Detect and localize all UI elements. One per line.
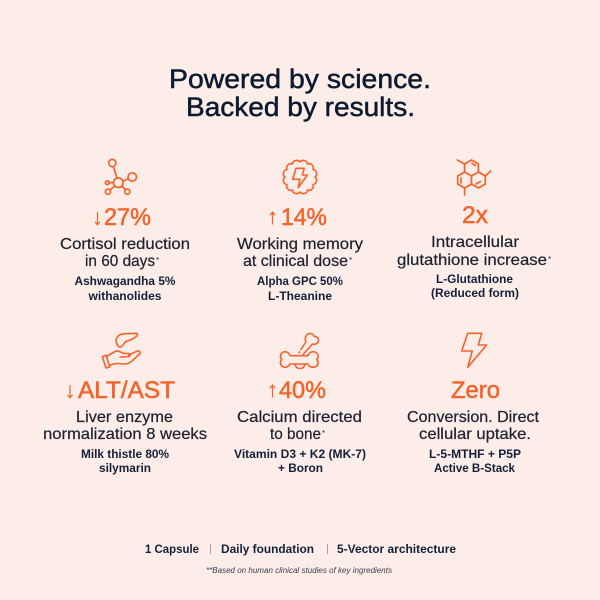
description: at clinical dose — [243, 253, 348, 270]
ingredient: + Boron — [278, 463, 323, 475]
ingredient: Ashwagandha 5% — [74, 276, 176, 288]
ingredient — [431, 274, 519, 300]
ingredient: (Reduced form) — [431, 288, 519, 300]
icon: molecule — [105, 159, 136, 194]
ingredient — [234, 449, 366, 475]
icon: hexagon molecule — [457, 160, 491, 195]
footer features: 5-Vector architecture — [337, 542, 456, 556]
description — [60, 236, 190, 270]
title: Backed by results. — [186, 92, 415, 122]
ingredient: L-5-MTHF + P5P — [429, 449, 521, 461]
ingredient: Milk thistle 80% — [81, 449, 169, 461]
panel: glutathione — [397, 160, 551, 300]
icon: crossed bones — [280, 333, 319, 368]
panel: conversion — [407, 333, 540, 475]
description — [43, 409, 207, 443]
description — [237, 409, 362, 443]
title: Powered by science. — [169, 64, 431, 94]
panel: memory — [237, 160, 363, 303]
ingredient: Alpha GPC 50% — [257, 276, 343, 288]
ingredient — [74, 276, 176, 303]
description — [237, 236, 363, 270]
ingredient: Vitamin D3 + K2 (MK-7) — [234, 449, 366, 461]
icon: liver on hand — [102, 333, 140, 368]
ingredient: silymarin — [99, 463, 151, 475]
footer features: Daily foundation — [221, 542, 314, 556]
description: * — [322, 429, 325, 438]
panel: liver — [43, 333, 207, 475]
stat: 27%: 27% — [104, 204, 151, 231]
icon: lightning bolt — [462, 333, 487, 367]
ingredient: withanolides — [87, 291, 162, 303]
description: * — [349, 256, 352, 265]
description: normalization 8 weeks — [43, 426, 207, 443]
description: Conversion. Direct — [407, 409, 540, 426]
footer features: 1 Capsule — [145, 542, 199, 556]
description: * — [156, 256, 159, 265]
description: cellular uptake. — [419, 426, 531, 443]
icon: brain with bolt — [283, 160, 317, 194]
ingredient — [429, 449, 521, 475]
stat: 14%: 14% — [281, 204, 327, 231]
description — [407, 409, 540, 443]
description: * — [548, 255, 551, 264]
stat: 40%: 40% — [279, 377, 326, 404]
description: Liver enzyme — [76, 409, 173, 426]
title — [169, 64, 431, 122]
ingredient — [81, 449, 169, 475]
stat: 2x: 2x — [462, 202, 488, 229]
description — [397, 234, 551, 269]
stat: Zero: Zero — [451, 377, 500, 404]
ingredient: L-Theanine — [268, 291, 332, 303]
description: Intracellular — [431, 234, 520, 251]
description: in 60 days — [85, 253, 155, 270]
panel: cortisol — [60, 159, 190, 303]
description: Working memory — [237, 236, 363, 253]
description: to bone — [270, 426, 321, 443]
description: glutathione increase — [397, 252, 547, 269]
stat: ALT/AST: ALT/AST — [78, 377, 175, 404]
description: Cortisol reduction — [60, 236, 190, 253]
ingredient: Active B-Stack — [434, 463, 516, 475]
footer features — [145, 542, 456, 556]
footnote: **Based on human clinical studies of key ingredients — [206, 566, 392, 575]
ingredient: L-Glutathione — [436, 274, 513, 286]
ingredient — [257, 276, 343, 303]
description: Calcium directed — [237, 409, 362, 426]
panel: bone — [234, 333, 366, 475]
